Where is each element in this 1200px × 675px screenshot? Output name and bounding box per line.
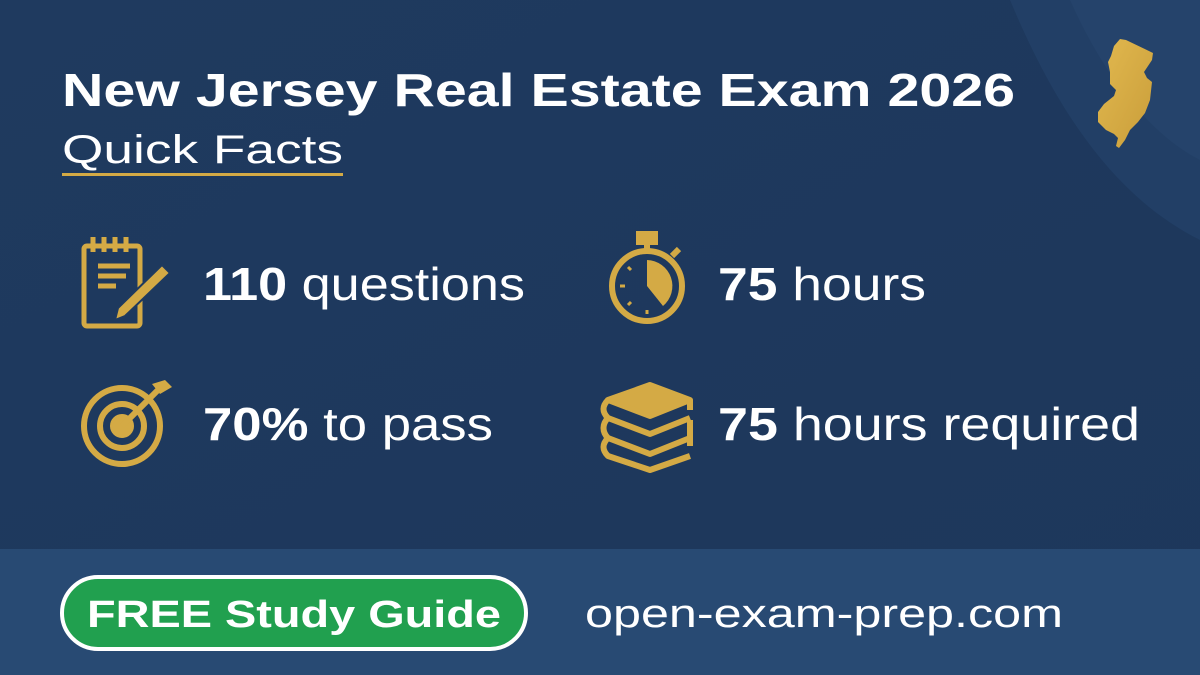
button: free study guide bbox=[62, 577, 526, 649]
fact: hours bbox=[612, 234, 926, 321]
fact: hours required bbox=[604, 385, 1140, 470]
footer band bbox=[0, 549, 1200, 675]
website url: open-exam-prep.com bbox=[585, 592, 1063, 636]
icon: stopwatch bbox=[612, 234, 682, 321]
icon: target bbox=[84, 380, 172, 464]
icon: New Jersey map bbox=[1098, 39, 1153, 148]
fact: questions bbox=[84, 237, 525, 326]
fact: pass score: 70% to pass bbox=[203, 398, 493, 450]
fact: hours required: 75 hours required bbox=[718, 398, 1140, 450]
title: New Jersey Real Estate Exam 2026 bbox=[62, 64, 1015, 116]
icon: book stack bbox=[604, 385, 690, 470]
subtitle: Quick Facts bbox=[62, 128, 343, 172]
subtitle bbox=[62, 128, 343, 176]
icon: notepad with pencil bbox=[84, 237, 170, 326]
fact: pass score bbox=[84, 380, 493, 464]
fact: questions: 110 questions bbox=[203, 258, 525, 310]
fact: hours: 75 hours bbox=[718, 258, 926, 310]
button: free study guide: FREE Study Guide bbox=[87, 594, 501, 636]
